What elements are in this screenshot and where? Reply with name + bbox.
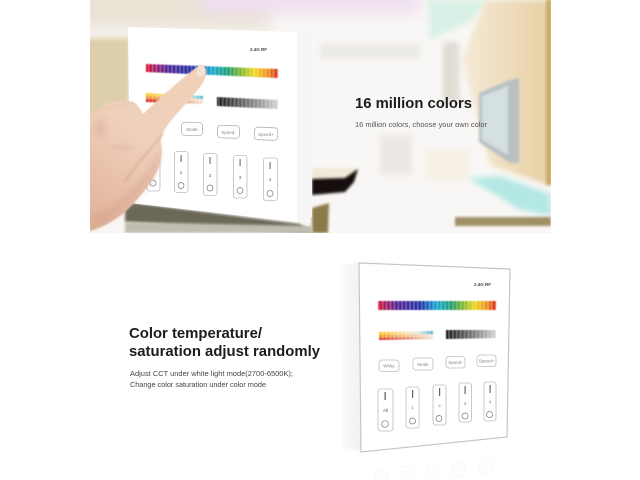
channel 1: 1 bbox=[180, 170, 183, 175]
rainbow slider bbox=[146, 64, 278, 78]
room: sideboard bbox=[380, 135, 412, 175]
text: 16 million colors description: 16 million colors, choose your own color bbox=[355, 120, 487, 129]
channel 3: 3 bbox=[239, 175, 242, 180]
hand: upper finger crease bbox=[95, 103, 133, 112]
room: left tan wall bbox=[90, 35, 129, 115]
room: floor beneath panel bbox=[125, 222, 312, 233]
channel 4: 4 bbox=[269, 177, 272, 182]
button Mode bbox=[181, 122, 203, 136]
button White: White bbox=[383, 364, 395, 368]
button Mode: Mode bbox=[186, 127, 198, 132]
channel 2 bbox=[433, 385, 446, 425]
button Mode bbox=[413, 358, 433, 370]
panel: wall controller front view bbox=[340, 263, 510, 452]
controller side bbox=[297, 32, 312, 222]
heading: color temperature: Color temperature/ bbox=[129, 325, 263, 342]
channel 2 bbox=[204, 154, 217, 196]
heading: 16 million colors: 16 million colors bbox=[355, 96, 472, 112]
room: black sofa bbox=[312, 169, 358, 195]
colour saturation slider bbox=[146, 93, 203, 104]
button Speed+ bbox=[254, 127, 278, 140]
channel 1 bbox=[406, 387, 419, 428]
channel 2: 2 bbox=[438, 403, 441, 408]
controller side bbox=[340, 263, 361, 452]
hand: lower hand shade bbox=[90, 145, 161, 231]
room: sofa leg bbox=[312, 203, 329, 233]
icon: pointing hand bbox=[88, 65, 206, 231]
room: pale beam bbox=[320, 44, 420, 58]
button Speed+: Speed+ bbox=[479, 358, 495, 364]
channel 3 bbox=[459, 383, 472, 422]
channel 1: 1 bbox=[411, 405, 414, 410]
grey brightness slider bbox=[217, 97, 278, 109]
channel 3 bbox=[234, 156, 247, 198]
controller face bbox=[359, 263, 510, 452]
room: pink ceiling bbox=[200, 0, 420, 14]
room: cyan light bbox=[468, 176, 551, 216]
button Speed-: Speed- bbox=[221, 130, 236, 135]
room: vases bbox=[425, 150, 470, 180]
panel: hand-touched wall controller bbox=[128, 27, 312, 222]
room: mint ceiling bbox=[428, 0, 488, 40]
channel 4 bbox=[264, 158, 278, 200]
channel 4 bbox=[484, 382, 496, 421]
button Speed-: Speed- bbox=[448, 360, 463, 365]
controller face bbox=[128, 27, 297, 222]
photo: blurred living room bbox=[70, 0, 552, 233]
button White bbox=[379, 360, 399, 372]
room: floor strip bbox=[455, 217, 551, 226]
wifi label: 2.4G RF bbox=[250, 47, 267, 52]
button Speed+ bbox=[477, 355, 496, 366]
button Speed- bbox=[446, 356, 465, 368]
room: wall-mounted TV bbox=[479, 78, 519, 163]
heading: color temperature: saturation adjust randomly bbox=[129, 343, 321, 360]
channel 1 bbox=[174, 152, 188, 192]
reflection under controller bbox=[375, 459, 492, 480]
text: adjust description: Change color saturation under color mode bbox=[130, 380, 266, 389]
infographic canvas bbox=[90, 0, 551, 453]
colour saturation slider bbox=[379, 331, 433, 340]
channel All bbox=[147, 150, 160, 191]
room: grey pillar bbox=[443, 42, 459, 102]
channel All: All bbox=[383, 408, 388, 413]
finger nail bbox=[196, 66, 205, 77]
grey brightness slider bbox=[446, 330, 496, 339]
room: dark strip beneath panel bbox=[125, 202, 312, 233]
hand: finger fold bbox=[125, 133, 163, 182]
room: right wood wall bbox=[462, 0, 551, 186]
channel 4: 4 bbox=[489, 399, 492, 404]
button Mode: Mode bbox=[417, 362, 429, 367]
channel 2: 2 bbox=[209, 173, 212, 178]
button Speed+: Speed+ bbox=[258, 132, 274, 137]
room: upper left beige wall bbox=[70, 0, 270, 30]
hand: knuckle shadow bbox=[94, 120, 106, 136]
channel All bbox=[378, 389, 393, 431]
hand: palm shadow bbox=[118, 146, 129, 150]
button Speed- bbox=[217, 125, 240, 138]
room: sofa cushion bbox=[312, 168, 358, 180]
heading: color temperature bbox=[129, 325, 321, 360]
channel 3: 3 bbox=[464, 401, 467, 406]
rainbow slider bbox=[378, 301, 496, 310]
text: adjust description: Adjust CCT under white light mode(2700-6500K); bbox=[130, 369, 293, 378]
room: wood edge bbox=[546, 0, 552, 185]
wifi label: 2.4G RF bbox=[474, 282, 491, 287]
text: adjust description bbox=[130, 369, 293, 389]
